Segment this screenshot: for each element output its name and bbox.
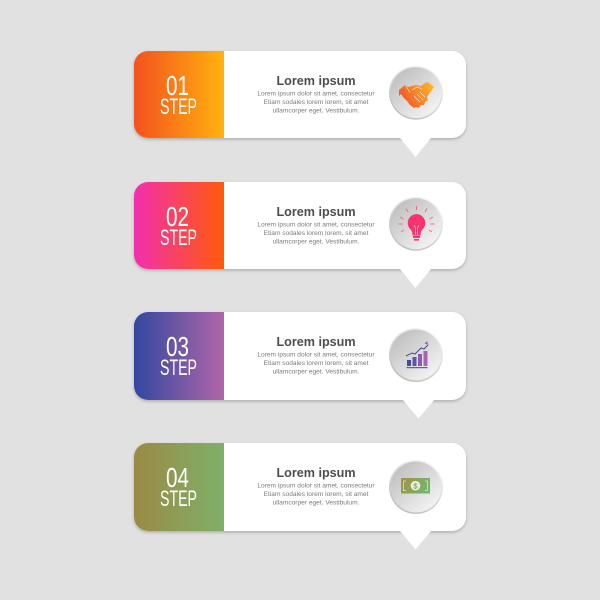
text block 1: ullamcorper eget. Vestibulum. (273, 108, 360, 114)
card shape 4 (134, 443, 466, 550)
panel: step 2 (134, 182, 466, 288)
step label 1: STEP (160, 94, 197, 119)
text block 4 (257, 466, 375, 506)
step label 1 (160, 70, 197, 119)
text block 3: Lorem ipsum dolor sit amet, consectetur (257, 352, 375, 358)
text block 2: Lorem ipsum dolor sit amet, consectetur (257, 222, 375, 228)
step label 4: STEP (160, 486, 197, 511)
icon: banknote (389, 460, 443, 514)
text block 3 (257, 335, 375, 376)
card shape 1 (134, 51, 466, 157)
panel: step 1 (134, 51, 466, 157)
text block 1: Lorem ipsum (276, 74, 356, 88)
text block 2: Etiam sodales lorem lorem, sit amet (264, 230, 369, 237)
step label 2: STEP (160, 225, 197, 250)
step label 4 (160, 462, 197, 511)
step label 3: 03 (166, 331, 189, 362)
text block 4: Etiam sodales lorem lorem, sit amet (264, 491, 369, 498)
text block 3: ullamcorper eget. Vestibulum. (273, 368, 360, 376)
text block 4: Lorem ipsum (276, 466, 356, 480)
panel: step 3 (134, 312, 466, 418)
text block 3: Lorem ipsum (276, 335, 356, 349)
card shape 2 (134, 182, 466, 288)
colour tab 3 (134, 312, 224, 400)
colour tab 2 (134, 182, 224, 269)
colour tab 1 (134, 51, 224, 138)
text block 1: Etiam sodales lorem lorem, sit amet (264, 99, 369, 106)
icon: handshake (389, 66, 443, 120)
icon: growth chart (389, 328, 443, 382)
panel: step 4 (134, 443, 466, 550)
text block 2 (257, 205, 375, 246)
icon: light bulb (389, 197, 443, 251)
text block 4: Lorem ipsum dolor sit amet, consectetur (257, 482, 375, 490)
step label 1: 01 (166, 70, 189, 101)
text block 2: Lorem ipsum (276, 205, 356, 219)
step label 4: 04 (166, 462, 189, 493)
step label 2: 02 (166, 201, 189, 232)
text block 4: ullamcorper eget. Vestibulum. (273, 500, 360, 506)
text block 3: Etiam sodales lorem lorem, sit amet (264, 360, 369, 367)
text block 1: Lorem ipsum dolor sit amet, consectetur (257, 90, 375, 98)
step label 3 (160, 331, 197, 380)
step label 2 (160, 201, 197, 250)
text block 2: ullamcorper eget. Vestibulum. (273, 238, 360, 246)
icon: banknote: $ (413, 482, 418, 490)
colour tab 4 (134, 443, 224, 531)
text block 1 (257, 74, 375, 114)
card shape 3 (134, 312, 466, 418)
step label 3: STEP (160, 355, 197, 380)
